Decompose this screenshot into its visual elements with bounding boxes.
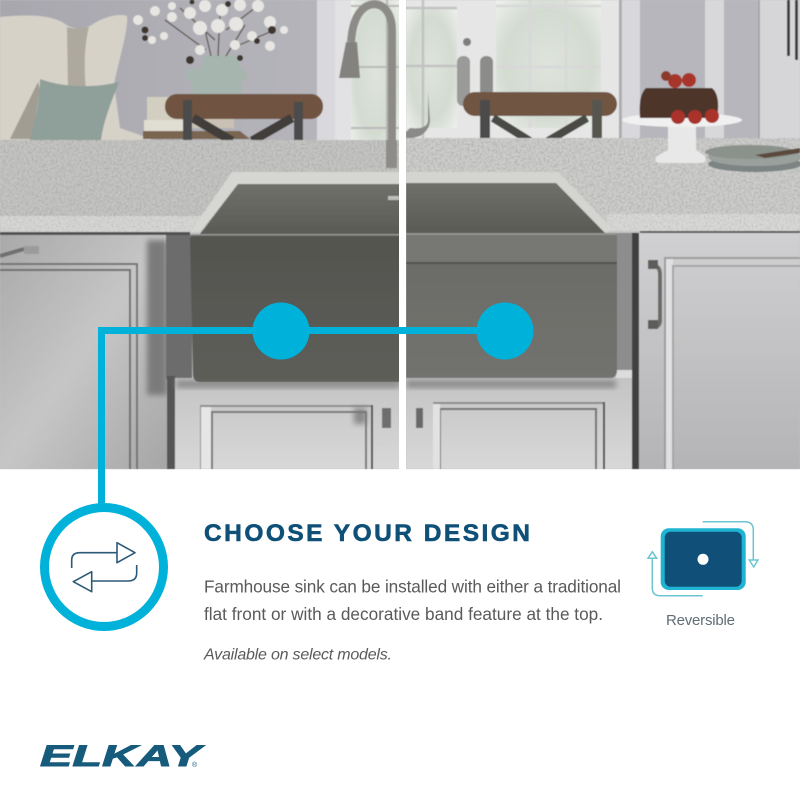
- sink right side trim: [616, 233, 633, 373]
- description text: Farmhouse sink can be installed with either a traditional: [204, 576, 621, 596]
- lower cabinet left: [167, 376, 400, 469]
- logo: [40, 740, 206, 773]
- photo: kitchen farmhouse sink: [0, 0, 800, 469]
- sink apron with decorative band: [406, 233, 617, 378]
- handle on the faucet base: [406, 92, 430, 140]
- white center divider: [399, 0, 406, 469]
- cabinet door pull: [648, 260, 660, 329]
- wall trim and pillar: [622, 0, 800, 140]
- right cabinet: [632, 233, 800, 469]
- countertop: [406, 138, 800, 233]
- vase of cotton stems: [133, 0, 288, 96]
- stacked books and side table: [143, 97, 250, 139]
- icon: swap arrows in circle: [44, 508, 164, 626]
- bar stool back: [165, 94, 323, 141]
- availability note: Available on select models.: [203, 646, 392, 664]
- cabinet side beside sink: [166, 235, 192, 379]
- sink basin, left: [190, 172, 400, 234]
- description text: flat front or with a decorative band feature at the top.: [204, 604, 603, 624]
- right half of the photo: banded front sink: [406, 0, 800, 469]
- french doors: [406, 0, 620, 145]
- stack of plates: [705, 145, 800, 172]
- left half of the photo: flat front sink: [0, 0, 400, 469]
- hotspot: decorative band: [476, 302, 534, 360]
- description text: [204, 576, 621, 624]
- logo: ®: [192, 761, 198, 769]
- icon: reversible sink: [648, 522, 758, 596]
- bar stool back: [463, 92, 617, 141]
- hotspot: flat front: [252, 302, 310, 360]
- heading: CHOOSE YOUR DESIGN: [204, 520, 530, 547]
- cake stand with chocolate cake and strawberries: [622, 71, 742, 163]
- faucet: [339, 4, 392, 166]
- callout connector line: [102, 330, 505, 506]
- sink basin, right: [406, 172, 608, 234]
- wingback armchair: [0, 15, 152, 140]
- countertop: [0, 140, 400, 235]
- left cabinet: [0, 235, 167, 469]
- icon label: Reversible: [666, 612, 735, 629]
- logo: ELKAY: [40, 740, 206, 773]
- pillow: [30, 79, 119, 140]
- lower cabinet right: [406, 370, 632, 469]
- sink apron, flat front: [190, 235, 400, 382]
